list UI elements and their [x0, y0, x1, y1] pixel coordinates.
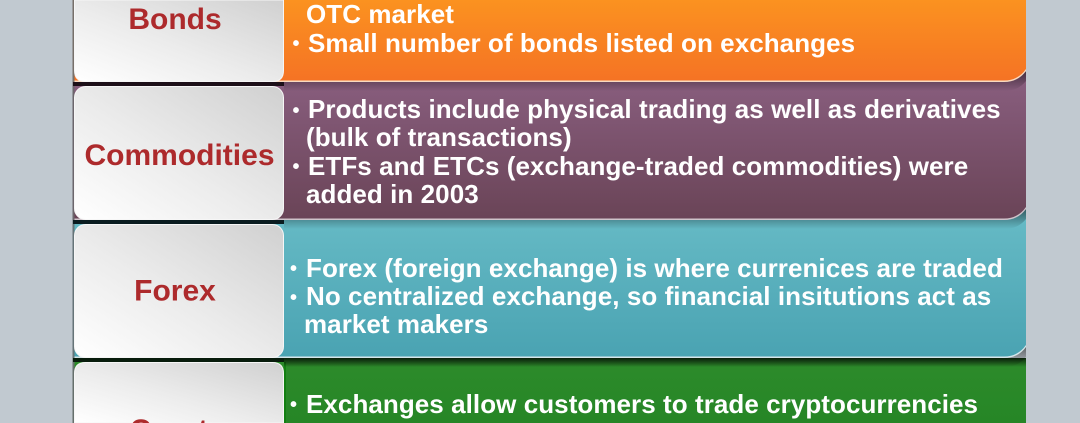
commodities text: (bulk of transactions): [306, 122, 572, 152]
commodities text: ETFs and ETCs (exchange-traded commodities) were: [308, 151, 968, 181]
forex text: •: [290, 258, 297, 280]
crypto text: Exchanges allow customers to trade cryptocurrencies: [306, 389, 978, 419]
forex text: market makers: [304, 309, 488, 339]
commodities label box: [74, 86, 284, 220]
forex text: •: [290, 287, 297, 309]
commodities text: added in 2003: [306, 179, 479, 209]
bonds text: •: [292, 33, 300, 55]
forex label box: Forex: [134, 274, 216, 308]
forex label box: [74, 224, 284, 358]
crypto label box: [74, 362, 284, 423]
commodities text: [292, 94, 1001, 209]
panel: crypto: [72, 358, 1026, 423]
bonds text: Small number of bonds listed on exchanges: [308, 28, 855, 58]
forex text: [290, 253, 1003, 339]
commodities text: Products include physical trading as well as derivatives: [308, 94, 1001, 124]
forex text: No centralized exchange, so financial insitutions act as: [306, 281, 991, 311]
crypto text: •: [290, 394, 297, 416]
bonds label box: [74, 0, 284, 82]
commodities text: •: [292, 156, 300, 178]
forex text: Forex (foreign exchange) is where currenices are traded: [306, 253, 1003, 283]
commodities label box: Commodities: [84, 139, 275, 172]
panel: bonds: [72, 0, 1026, 91]
commodities text: •: [292, 100, 300, 122]
bonds text: [292, 0, 855, 58]
panel: forex: [72, 210, 1026, 367]
bonds label box: Bonds: [128, 3, 222, 36]
panel: commodities: [72, 72, 1026, 229]
